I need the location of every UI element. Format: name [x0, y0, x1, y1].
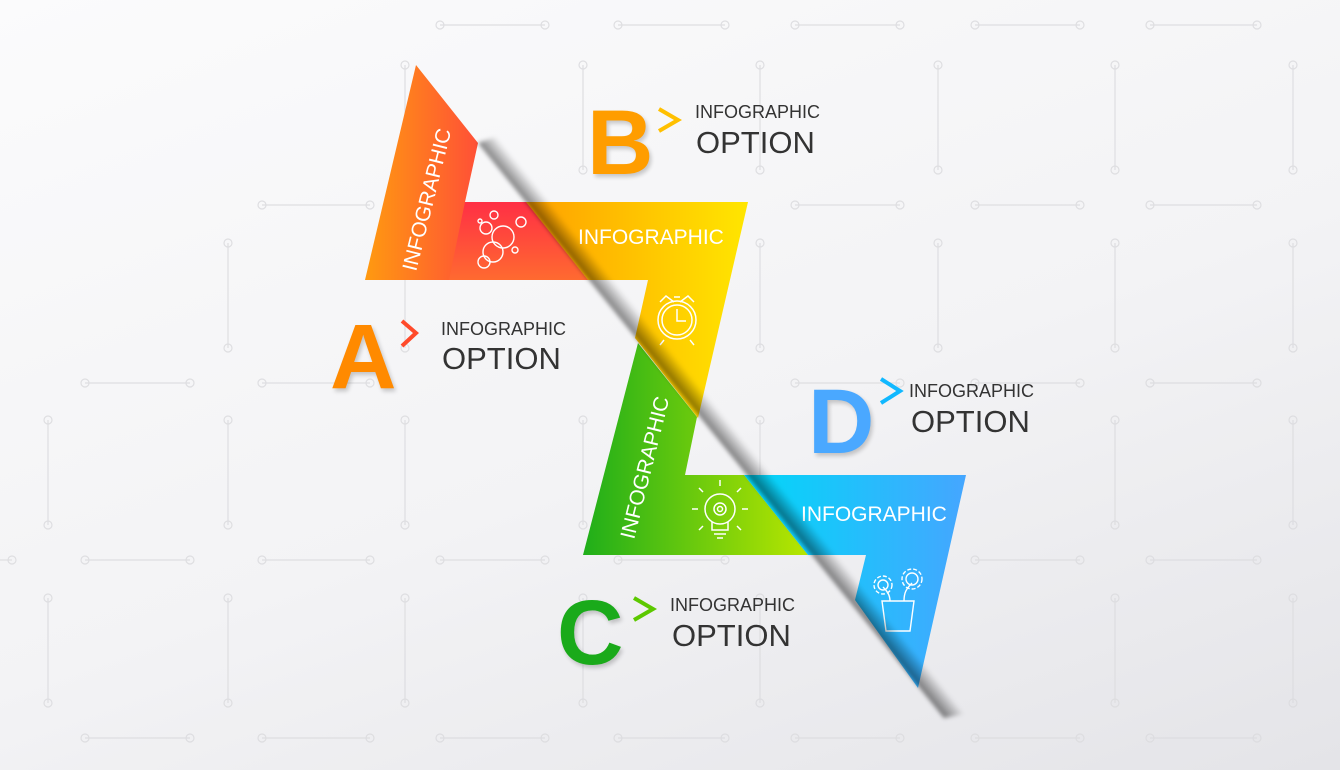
icon: flower pot: [874, 569, 922, 631]
label D: OPTION: [911, 404, 1030, 439]
text: INFOGRAPHIC yellow band: INFOGRAPHIC: [578, 226, 724, 249]
letter D: D: [808, 371, 874, 473]
letter C: C: [557, 582, 623, 684]
shape: yellow Z top: [526, 202, 748, 418]
chevrons: [402, 109, 900, 620]
label C: OPTION: [672, 618, 791, 653]
label D: [808, 371, 1034, 473]
label A: [330, 306, 566, 408]
text: INFOGRAPHIC blue band: INFOGRAPHIC: [801, 503, 947, 526]
label A: OPTION: [442, 341, 561, 376]
shape: red A section: [365, 65, 588, 280]
icon: bubbles: [478, 211, 526, 268]
caption A: INFOGRAPHIC: [441, 319, 566, 339]
caption D: INFOGRAPHIC: [909, 381, 1034, 401]
text: rotated INFOGRAPHIC red: INFOGRAPHIC: [399, 126, 456, 273]
shadow along diagonal cut: [478, 136, 964, 718]
shape: green section: [583, 343, 808, 555]
letter A: A: [330, 306, 396, 408]
icon: alarm clock: [658, 296, 696, 345]
label C: [557, 582, 795, 684]
shape: blue section: [744, 475, 966, 688]
text: rotated INFOGRAPHIC green: INFOGRAPHIC: [617, 394, 674, 541]
caption B: INFOGRAPHIC: [695, 102, 820, 122]
letter B: B: [587, 92, 653, 194]
label B: [587, 92, 820, 194]
label B: OPTION: [696, 125, 815, 160]
caption C: INFOGRAPHIC: [670, 595, 795, 615]
icon: lightbulb: [692, 480, 748, 538]
